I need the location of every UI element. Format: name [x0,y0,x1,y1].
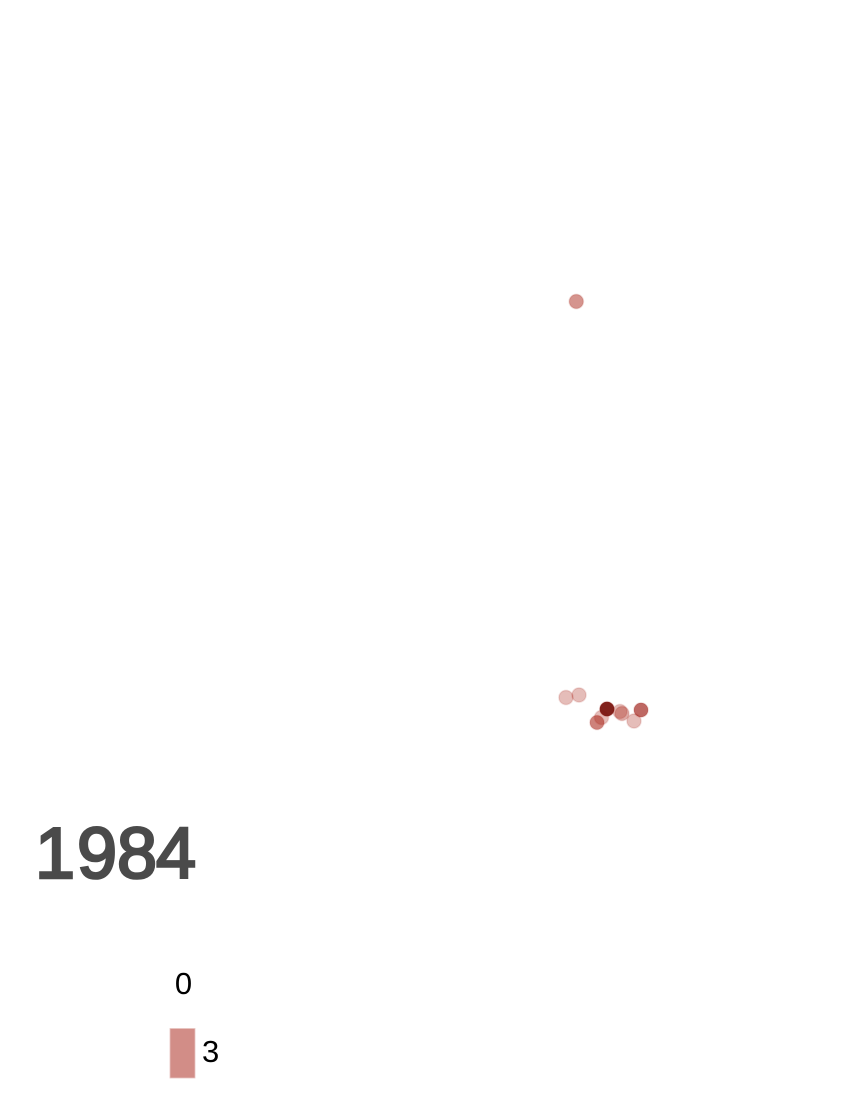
year title: 1984 [35,814,196,894]
data point: northern dot [569,294,583,309]
data points: southern cluster [559,688,648,730]
legend label: 0: 0 [175,966,192,1001]
legend swatch: 3 [170,1028,195,1078]
legend [170,966,219,1078]
legend label: 3: 3 [202,1034,219,1069]
